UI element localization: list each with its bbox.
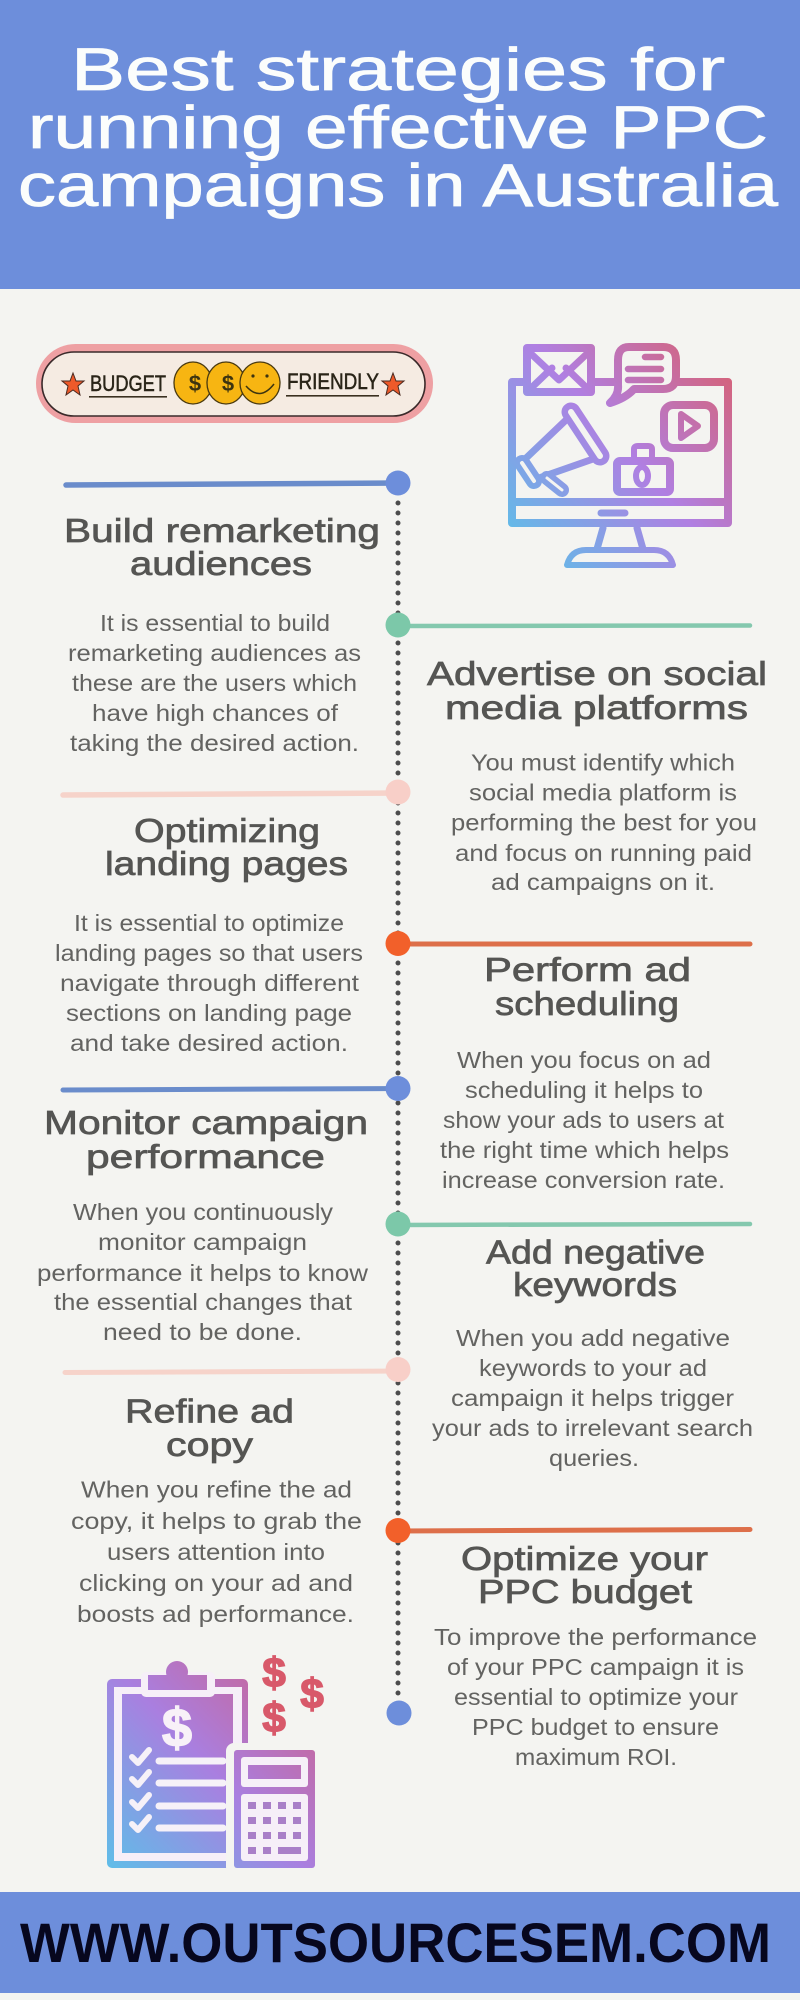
body text: remarketing audiences as — [68, 640, 361, 666]
icon: left star — [62, 373, 84, 395]
body text: When you add negative — [456, 1325, 730, 1351]
icon: coins: $ — [222, 371, 234, 396]
header band — [0, 0, 800, 289]
body text: your ads to irrelevant search — [432, 1415, 753, 1441]
dollar signs: $ — [300, 1670, 324, 1717]
body text: clicking on your ad and — [79, 1570, 353, 1596]
heading: PPC budget — [478, 1573, 692, 1610]
dollar signs — [262, 1649, 324, 1741]
heading — [486, 1234, 705, 1303]
title: campaigns in Australia — [18, 152, 779, 219]
body text — [440, 1047, 729, 1193]
body text: taking the desired action. — [70, 730, 359, 756]
body text: keywords to your ad — [479, 1355, 707, 1381]
body text: need to be done. — [103, 1319, 302, 1345]
body text: show your ads to users at — [443, 1107, 725, 1133]
connector: blue — [66, 470, 410, 496]
body text — [68, 610, 361, 756]
body text: and take desired action. — [70, 1030, 348, 1056]
clipboard: $ — [162, 1698, 192, 1758]
body text — [434, 1624, 757, 1770]
body text — [71, 1476, 362, 1627]
heading: scheduling — [495, 985, 679, 1022]
step 6: add negative keywords (right) — [386, 1212, 753, 1471]
step 7: refine ad copy (left) — [65, 1357, 410, 1627]
dollar signs: $ — [262, 1649, 286, 1696]
heading — [484, 951, 691, 1022]
heading — [64, 512, 380, 582]
heading: Add negative — [486, 1234, 705, 1270]
heading: Perform ad — [484, 951, 691, 988]
step 4: perform ad scheduling (right) — [386, 931, 750, 1193]
connector: green — [386, 612, 750, 638]
body text: navigate through different — [60, 970, 360, 996]
timeline end dot — [386, 1700, 412, 1726]
footer url: WWW.OUTSOURCESEM.COM — [20, 1911, 771, 1974]
body text: users attention into — [107, 1539, 325, 1565]
heading — [44, 1104, 368, 1175]
body text — [432, 1325, 753, 1471]
connector: green — [386, 1212, 750, 1236]
body text: performance it helps to know — [37, 1260, 368, 1286]
body text: PPC budget to ensure — [472, 1714, 719, 1740]
title — [18, 36, 779, 219]
body text: increase conversion rate. — [442, 1167, 725, 1193]
body text: have high chances of — [92, 700, 339, 726]
icon: video player — [664, 405, 714, 448]
title: Best strategies for — [71, 36, 725, 103]
icon: megaphone — [522, 412, 600, 490]
body text: queries. — [549, 1445, 639, 1471]
body text: performing the best for you — [451, 810, 757, 836]
calculator — [226, 1743, 320, 1875]
step 1: build remarketing audiences (left) — [64, 470, 410, 756]
icon: right star — [382, 373, 404, 395]
step 8: optimize your PPC budget (right) — [386, 1518, 757, 1770]
icon: coins: $ — [189, 371, 201, 396]
heading: copy — [166, 1426, 254, 1463]
clipboard — [107, 1661, 248, 1868]
body text: essential to optimize your — [454, 1684, 738, 1710]
heading: landing pages — [105, 845, 348, 882]
step 2: advertise on social media platforms (right) — [386, 612, 767, 895]
body text: the essential changes that — [54, 1289, 353, 1315]
heading: Refine ad — [125, 1392, 294, 1430]
body text: and focus on running paid — [455, 840, 752, 866]
body text: It is essential to build — [100, 610, 330, 636]
heading — [427, 655, 767, 726]
body text: these are the users which — [72, 670, 357, 696]
icon: monitor with marketing symbols — [512, 347, 728, 565]
body text: When you refine the ad — [81, 1476, 352, 1502]
badge word: friendly: FRIENDLY — [287, 369, 379, 394]
body text: monitor campaign — [98, 1229, 307, 1255]
footer band — [0, 1892, 800, 1993]
body text: When you continuously — [73, 1199, 334, 1225]
heading: audiences — [130, 545, 312, 582]
connector: orange — [386, 1518, 750, 1543]
heading — [125, 1392, 294, 1463]
body text: campaign it helps trigger — [451, 1385, 734, 1411]
body text: social media platform is — [469, 780, 737, 806]
body text: landing pages so that users — [55, 940, 363, 966]
heading — [105, 812, 348, 882]
heading — [461, 1540, 708, 1610]
dollar signs: $ — [262, 1694, 286, 1741]
heading: Build remarketing — [64, 512, 380, 549]
connector: pink — [65, 1357, 410, 1382]
icon: camera — [617, 446, 670, 492]
body text: copy, it helps to grab the — [71, 1508, 362, 1534]
heading: Advertise on social — [427, 655, 767, 692]
connector: orange — [386, 931, 750, 956]
timeline dotted line — [396, 503, 400, 1694]
icon: chat bubble — [610, 347, 676, 403]
checklist — [132, 1750, 223, 1830]
body text: ad campaigns on it. — [491, 869, 715, 895]
badge: budget friendly — [36, 344, 433, 423]
body text: To improve the performance — [434, 1624, 757, 1650]
body text: boosts ad performance. — [77, 1601, 354, 1627]
heading: media platforms — [445, 689, 748, 726]
heading: Optimizing — [134, 812, 320, 849]
body text: of your PPC campaign it is — [447, 1654, 744, 1680]
heading: keywords — [513, 1266, 677, 1303]
body text: When you focus on ad — [457, 1047, 711, 1073]
connector: blue — [63, 1076, 410, 1101]
heading: performance — [86, 1138, 325, 1175]
body text — [37, 1199, 368, 1345]
step 3: optimizing landing pages (left) — [55, 780, 410, 1056]
badge word: budget: BUDGET — [90, 371, 166, 396]
icon: clipboard with calculator and dollar signs — [107, 1649, 324, 1875]
heading: Monitor campaign — [44, 1104, 368, 1141]
heading: Optimize your — [461, 1540, 708, 1577]
step 5: monitor campaign performance (left) — [37, 1076, 410, 1345]
body text: the right time which helps — [440, 1137, 729, 1163]
body text — [55, 910, 363, 1056]
body text: scheduling it helps to — [465, 1077, 703, 1103]
body text: It is essential to optimize — [74, 910, 344, 936]
body text: You must identify which — [471, 750, 735, 776]
body text: sections on landing page — [66, 1000, 352, 1026]
icon: coins — [174, 362, 280, 404]
connector: pink — [63, 780, 410, 804]
icon: envelope — [527, 348, 591, 392]
title: running effective PPC — [28, 94, 768, 161]
body text — [451, 750, 757, 895]
body text: maximum ROI. — [515, 1744, 677, 1770]
